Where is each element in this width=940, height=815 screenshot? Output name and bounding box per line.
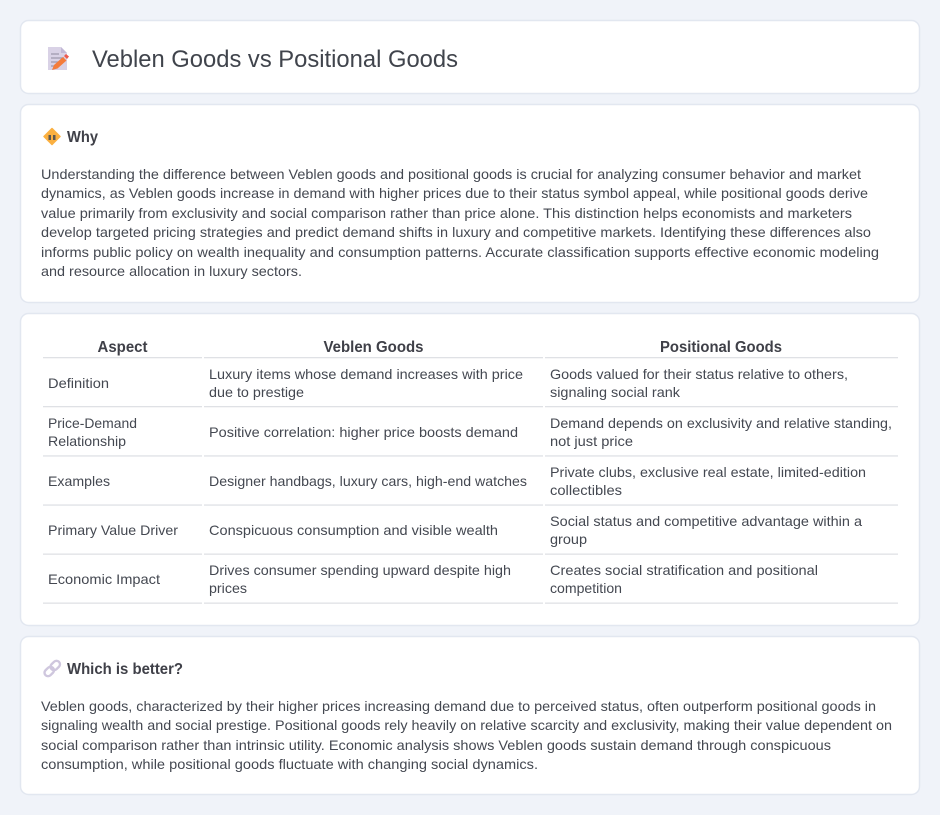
panel: which is better bbox=[20, 636, 920, 794]
table header row: Aspect bbox=[98, 339, 148, 356]
table row: economic impact: competition bbox=[550, 580, 622, 596]
table row: primary value driver: Conspicuous consumption and visible wealth bbox=[209, 522, 498, 538]
text block: which is better paragraph: Veblen goods, characterized by their higher prices increasing demand due to perceived status, often outperform positional goods in bbox=[41, 698, 876, 714]
table row: economic impact: prices bbox=[209, 580, 247, 596]
table row: economic impact: Drives consumer spending upward despite high bbox=[209, 562, 511, 578]
table row: examples bbox=[48, 464, 866, 498]
text block: which is better paragraph: consumption, while positional goods fluctuate with changing social dynamics. bbox=[41, 756, 538, 772]
table row: primary value driver: Social status and competitive advantage within a bbox=[550, 513, 862, 529]
table row: primary value driver bbox=[48, 513, 862, 547]
text block: why paragraph: Understanding the difference between Veblen goods and positional goods is crucial for analyzing consumer behavior and market bbox=[41, 166, 861, 182]
table row: examples: Private clubs, exclusive real estate, limited-edition bbox=[550, 464, 866, 480]
panel: title header bbox=[20, 20, 920, 94]
text block: why paragraph: develop targeted pricing strategies and predict demand shifts in luxury and competitive markets. Identifying these differences also bbox=[41, 224, 871, 240]
table header row: Veblen Goods bbox=[324, 339, 424, 356]
text block: which is better paragraph bbox=[41, 698, 892, 772]
heading: why: Why bbox=[67, 129, 98, 146]
table row: price-demand relationship: Positive correlation: higher price boosts demand bbox=[209, 424, 518, 440]
icon: warning diamond bbox=[44, 128, 60, 144]
table row: price-demand relationship bbox=[48, 415, 892, 449]
text block: why paragraph bbox=[41, 166, 879, 279]
table row: definition: signaling social rank bbox=[550, 384, 681, 400]
icon: chain link bbox=[43, 659, 61, 678]
text block: which is better paragraph: signaling wealth and social prestige. Positional goods rely heavily on relative scarcity and exclusivity, making their value dependent on bbox=[41, 717, 892, 733]
text block: why paragraph: and resource allocation in luxury sectors. bbox=[41, 263, 302, 279]
table row: definition: due to prestige bbox=[209, 384, 304, 400]
table row: examples: Designer handbags, luxury cars, high-end watches bbox=[209, 473, 527, 489]
table row: primary value driver: Primary Value Driver bbox=[48, 522, 178, 538]
title: Veblen Goods vs Positional Goods bbox=[92, 46, 458, 73]
panel: why bbox=[20, 104, 920, 302]
icon: document with pencil bbox=[48, 47, 69, 70]
table row: economic impact: Economic Impact bbox=[48, 571, 160, 587]
table row: price-demand relationship: not just price bbox=[550, 433, 633, 449]
table row: definition: Luxury items whose demand increases with price bbox=[209, 366, 523, 382]
table row: examples: Examples bbox=[48, 473, 110, 489]
heading: which is better: Which is better? bbox=[67, 661, 183, 678]
table row: definition: Goods valued for their status relative to others, bbox=[550, 366, 848, 382]
table row: economic impact: Creates social stratification and positional bbox=[550, 562, 818, 578]
table row: price-demand relationship: Demand depends on exclusivity and relative standing, bbox=[550, 415, 892, 431]
text block: which is better paragraph: social comparison rather than intrinsic utility. Economic analysis shows Veblen goods sustain demand through conspicuous bbox=[41, 737, 831, 753]
table row: price-demand relationship: Price-Demand bbox=[48, 415, 137, 431]
table row: examples: collectibles bbox=[550, 482, 622, 498]
table row: primary value driver: group bbox=[550, 531, 587, 547]
table header row: Positional Goods bbox=[660, 339, 782, 356]
table row: definition: Definition bbox=[48, 375, 109, 391]
table row: economic impact bbox=[48, 562, 818, 596]
panel: comparison table bbox=[20, 314, 920, 626]
table header row bbox=[98, 339, 782, 356]
text block: why paragraph: value primarily from exclusivity and social comparison rather than price alone. This distinction helps economists and marketers bbox=[41, 205, 852, 221]
text block: why paragraph: dynamics, as Veblen goods increase in demand with higher prices due to their status symbol appeal, while positional goods derive bbox=[41, 185, 868, 201]
text block: why paragraph: informs public policy on wealth inequality and consumption patterns. Accurate classification supports effective economic modeling bbox=[41, 244, 879, 260]
table row: definition bbox=[48, 366, 848, 400]
table row: price-demand relationship: Relationship bbox=[48, 433, 126, 449]
